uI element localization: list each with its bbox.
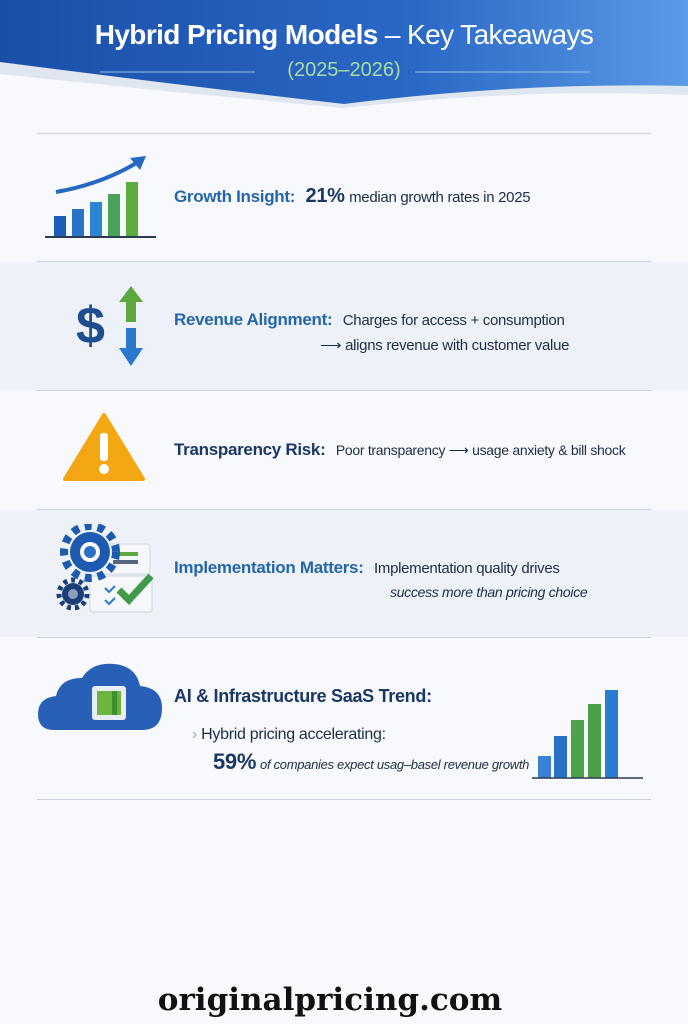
icon: dollar arrows [76,286,143,366]
heading: AI & Infrastructure SaaS Trend: [174,686,432,706]
text: aligns revenue: ⟶ aligns revenue with customer value [320,337,569,354]
icon: cloud chip [38,664,162,730]
heading: Transparency Risk: Poor transparency ⟶ usage anxiety & bill shock [174,440,625,459]
panel: AI & infrastructure [38,664,643,779]
title: Hybrid Pricing Models – Key Takeaways [95,19,593,50]
icon: dollar arrows: $ [76,297,105,355]
panel: growth insight [45,156,530,238]
chart: bars [532,690,643,779]
text: success: success more than pricing choice [390,584,587,600]
icon: growth bar chart [45,156,156,238]
heading: Implementation Matters: Implementation quality drives [174,558,560,577]
panel: transparency risk [63,412,626,481]
header banner [0,0,688,108]
heading: Growth Insight: 21% median growth rates in 2025 [174,185,530,207]
text: hybrid accelerating: › Hybrid pricing accelerating: [192,726,386,743]
panel: revenue alignment [0,262,688,390]
heading: Revenue Alignment: Charges for access + consumption [174,310,565,329]
footer: website: originalpricing.com [158,982,502,1018]
subtitle: (2025–2026) [287,59,401,81]
icon: warning [63,412,145,481]
panel: implementation matters [0,510,688,637]
text: 59% stat: 59% of companies expect usag–basel revenue growth [213,749,529,774]
icon: gears and checklist [56,524,154,612]
